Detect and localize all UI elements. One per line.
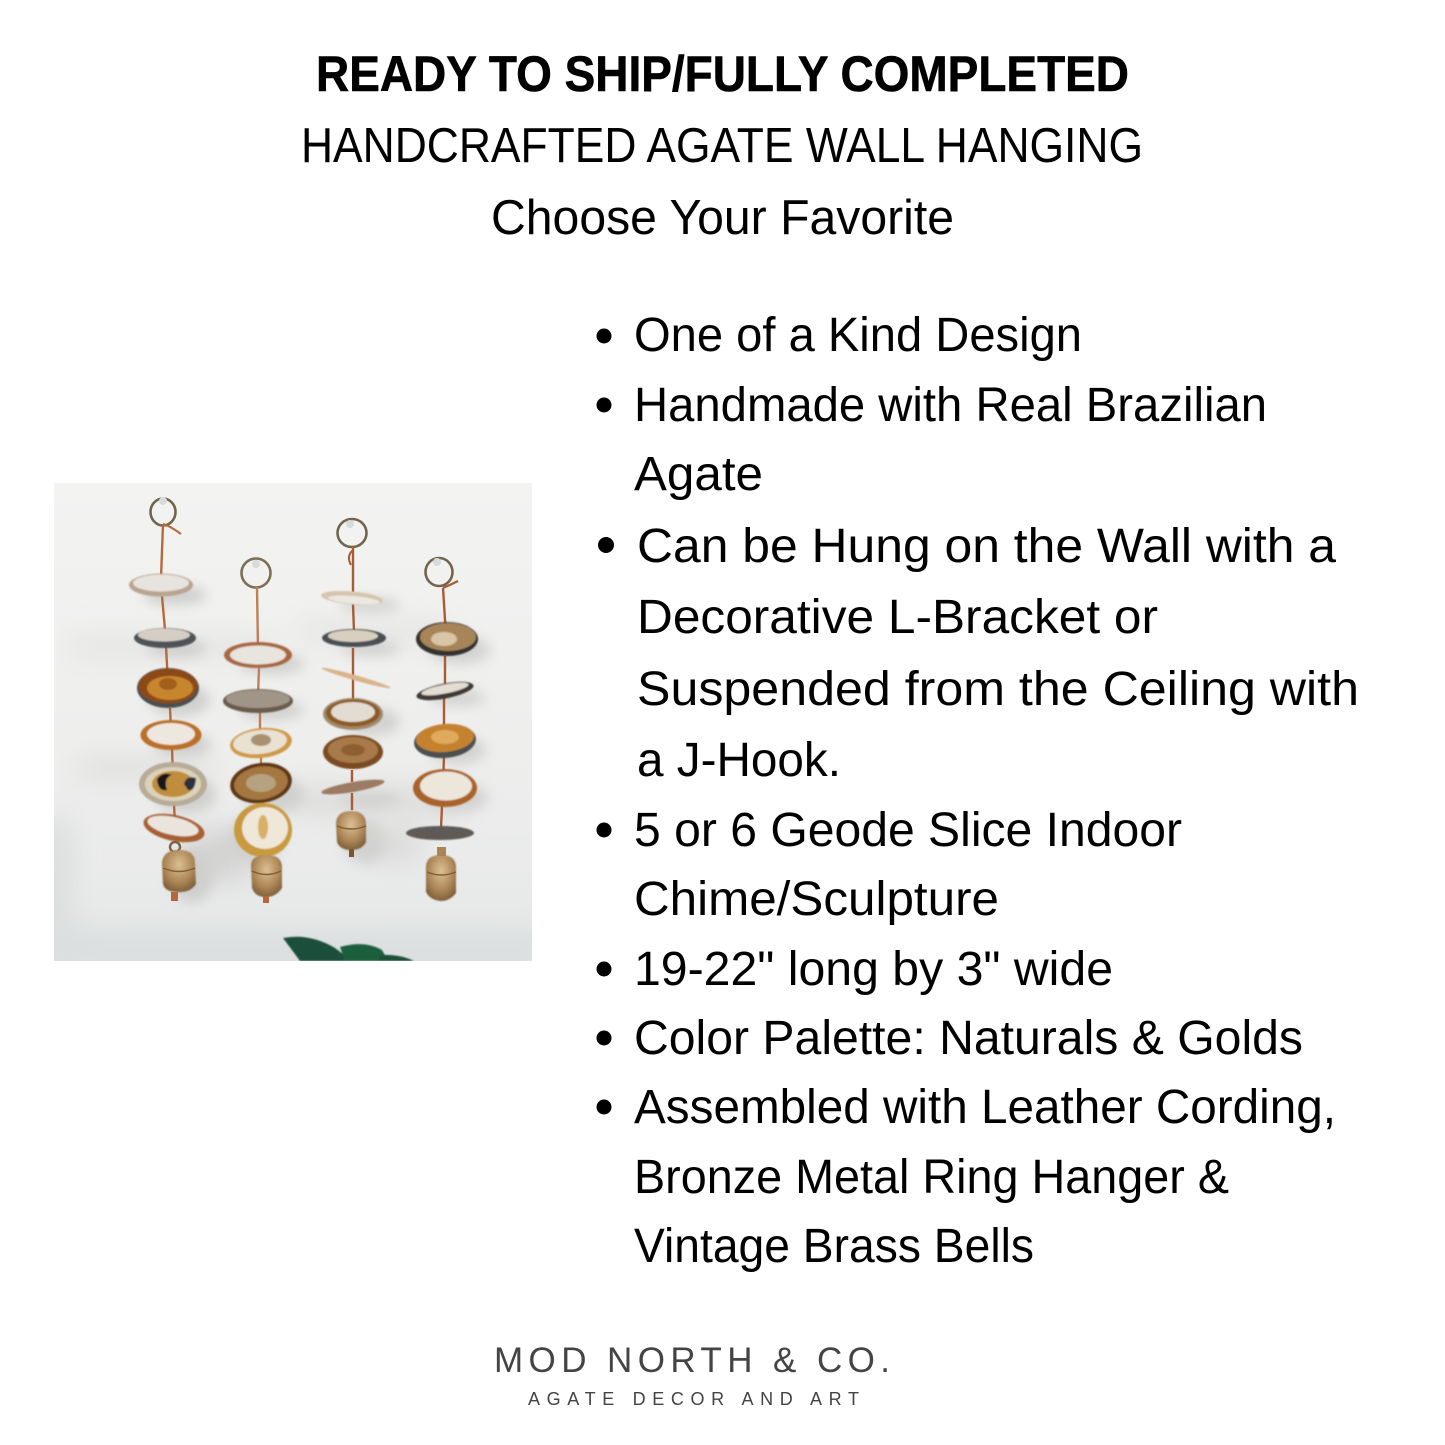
bullet: handmade: Handmade with Real Brazilian xyxy=(634,379,1267,432)
bullet: materials: Assembled with Leather Cording, xyxy=(634,1081,1336,1134)
bullet: hanging options: a J-Hook. xyxy=(637,734,841,787)
bullet: hanging options xyxy=(598,520,1359,787)
hanging 4 xyxy=(406,558,490,901)
hanging 2 xyxy=(223,558,305,903)
bullet: geode slices xyxy=(596,804,1182,926)
bullet: handmade: Agate xyxy=(634,448,763,501)
bullet: handmade xyxy=(596,379,1267,501)
bullet: colour palette: Color Palette: Naturals & Golds xyxy=(634,1012,1303,1065)
bullet: one of a kind: One of a Kind Design xyxy=(634,309,1082,362)
bullet: hanging options: Can be Hung on the Wall with a xyxy=(637,520,1336,573)
bullet: geode slices: 5 or 6 Geode Slice Indoor xyxy=(634,804,1182,857)
bullet: materials: Vintage Brass Bells xyxy=(634,1220,1034,1273)
bullet: materials: Bronze Metal Ring Hanger & xyxy=(634,1151,1229,1204)
subtitle: HANDCRAFTED AGATE WALL HANGING xyxy=(301,119,1143,173)
hanging 1 xyxy=(129,497,216,903)
bullet: geode slices: Chime/Sculpture xyxy=(634,873,999,926)
product photo: four agate wall hangings xyxy=(40,483,550,980)
title: READY TO SHIP/FULLY COMPLETED xyxy=(316,46,1129,102)
bullet list xyxy=(596,309,1359,1273)
hanging 3 xyxy=(321,519,400,864)
wall shadows xyxy=(54,763,532,961)
brand name: MOD NORTH & CO. xyxy=(494,1341,890,1380)
brand tagline: AGATE DECOR AND ART xyxy=(528,1389,859,1409)
bullet: hanging options: Decorative L-Bracket or xyxy=(637,591,1158,644)
bullet: materials xyxy=(596,1081,1336,1273)
tagline: Choose Your Favorite xyxy=(491,191,954,245)
plant leaf xyxy=(283,937,414,961)
bullet: hanging options: Suspended from the Ceiling with xyxy=(637,663,1359,716)
bullet: dimensions: 19-22" long by 3" wide xyxy=(634,943,1113,996)
